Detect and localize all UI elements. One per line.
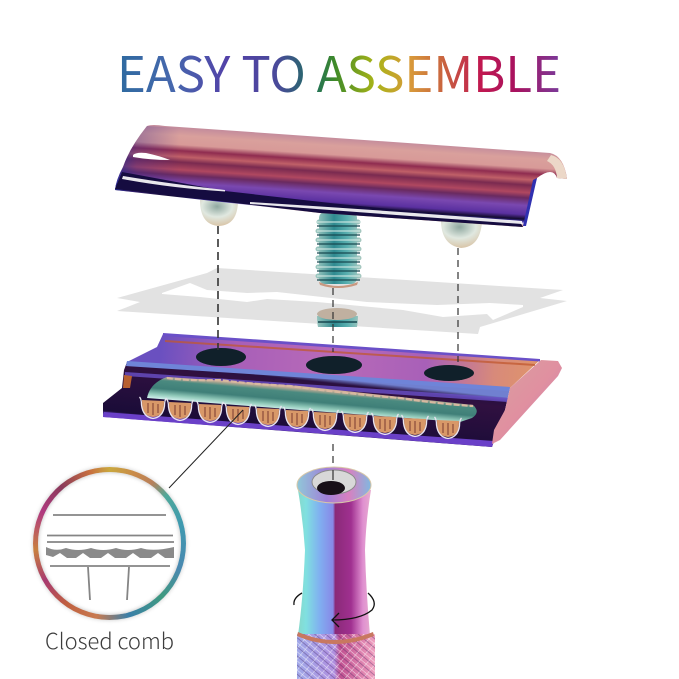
lower screw thread (317, 308, 358, 327)
base comb slot (147, 377, 477, 422)
leader line to comb (169, 410, 243, 488)
razor handle (297, 467, 375, 679)
closed comb label: Closed comb (45, 624, 174, 656)
blade (117, 268, 567, 334)
handle collar (297, 632, 374, 644)
icon: closed comb magnifier ring (33, 467, 186, 620)
handle neck (298, 490, 371, 635)
icon: right bolt (441, 220, 482, 248)
icon: rotation arrow (294, 593, 374, 627)
dashed alignment lines (218, 226, 458, 490)
handle knurled grip (297, 634, 375, 679)
screw holes (196, 348, 474, 381)
top cap (115, 125, 567, 227)
comb teeth (140, 397, 462, 438)
title: EASY TO ASSEMBLE (117, 36, 561, 107)
base top plate (127, 334, 540, 388)
base right end face (492, 360, 562, 444)
center screw thread (317, 212, 360, 288)
base front rail (103, 362, 510, 447)
closed comb diagram (46, 515, 174, 600)
handle top rim (297, 467, 371, 503)
icon: left bolt (200, 200, 238, 226)
top cap bolts (200, 200, 482, 248)
razor base plate (103, 333, 562, 447)
